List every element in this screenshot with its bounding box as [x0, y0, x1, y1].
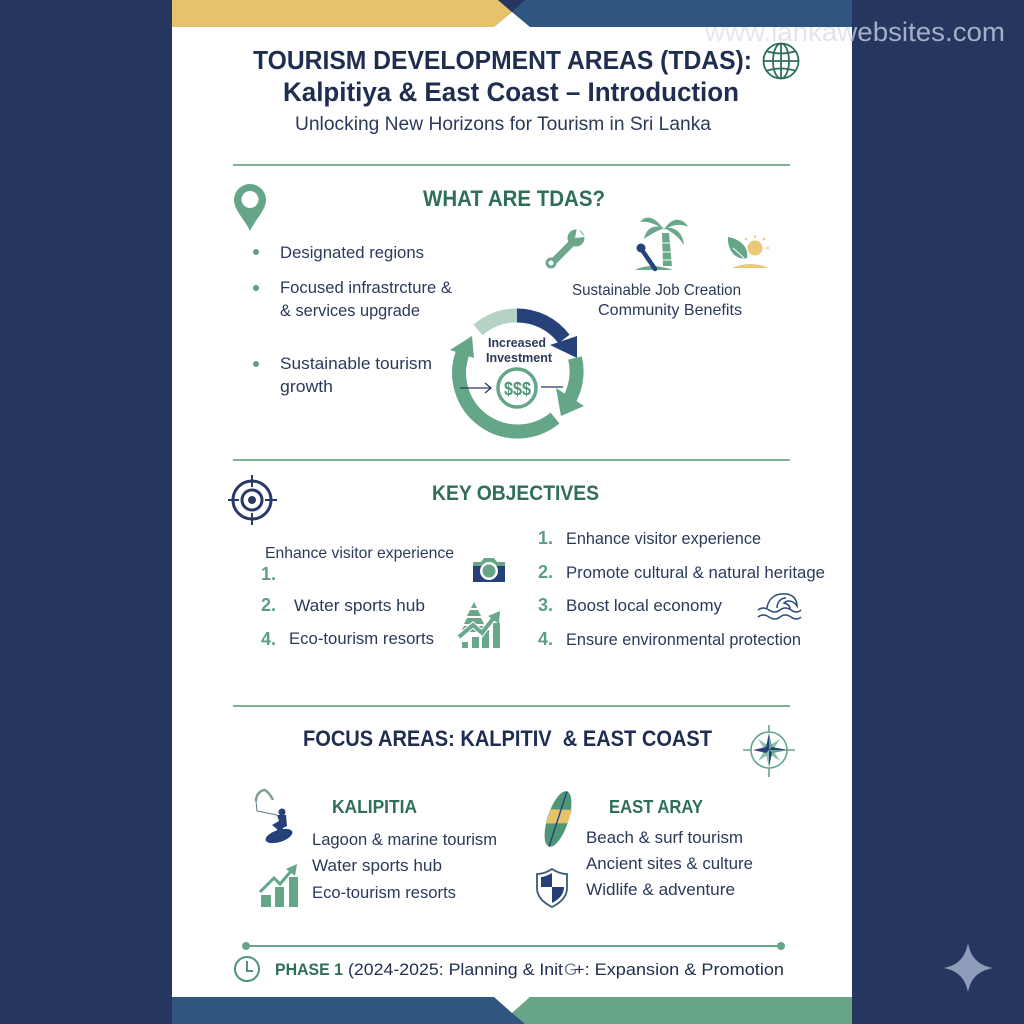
- list: left objectives: 4.: [261, 629, 276, 649]
- panel: Kalpitiya: KALIPITIA: [332, 797, 417, 817]
- timeline line: [242, 942, 785, 950]
- panel: Kalpitiya: [312, 797, 497, 902]
- cycle diagram: increased investment: [450, 315, 584, 432]
- cycle diagram: increased investment: $$$: [504, 379, 531, 399]
- list: right objectives: 1.: [538, 528, 553, 548]
- cycle diagram: increased investment: Increased: [488, 336, 546, 350]
- watermark: www.lankawebsites.com: [704, 17, 1005, 47]
- icon: palm and wrench: [635, 218, 688, 270]
- panel: East Coast: Beach & surf tourism: [586, 828, 743, 847]
- heading: key objectives: KEY OBJECTIVES: [432, 482, 599, 505]
- panel: East Coast: [586, 797, 753, 899]
- icon: pagoda and growth chart: [459, 602, 500, 648]
- panel: East Coast: Ancient sites & culture: [586, 854, 753, 873]
- list: what are TDAs: growth: [280, 377, 333, 396]
- list: right objectives: Enhance visitor experience: [566, 529, 761, 548]
- panel: Kalpitiya: Water sports hub: [312, 856, 442, 875]
- icon: surfboard: [539, 788, 577, 850]
- heading: focus areas: FOCUS AREAS: KALPITIV & EAST COAST: [303, 726, 713, 751]
- title: Kalpitiya & East Coast – Introduction: [283, 77, 739, 107]
- icon: compass: [743, 725, 795, 777]
- list: left objectives: 1.: [261, 564, 276, 584]
- list: right objectives: Boost local economy: [566, 596, 722, 615]
- top banner: [172, 0, 852, 27]
- list: left objectives: 2.: [261, 595, 276, 615]
- list: right objectives: 2.: [538, 562, 553, 582]
- text: job creation and community benefits: Sustainable Job Creation: [572, 282, 741, 299]
- list: right objectives: 3.: [538, 595, 553, 615]
- bottom banner: [172, 997, 852, 1024]
- white card: [172, 27, 852, 997]
- icon: waves: [758, 594, 801, 619]
- icon: target: [228, 475, 277, 525]
- icon: globe: [763, 43, 799, 79]
- list: what are TDAs: [253, 243, 453, 396]
- heading: what are TDAs: WHAT ARE TDAS?: [423, 186, 605, 211]
- icon: map pin: [234, 184, 266, 231]
- timeline text: PHASE 1: [275, 960, 343, 979]
- list: left objectives: [261, 545, 454, 649]
- list: right objectives: Ensure environmental protection: [566, 630, 801, 649]
- list: left objectives: Enhance visitor experience: [265, 545, 454, 562]
- icon: leaf and sun: [728, 235, 769, 268]
- timeline text: G: [564, 960, 577, 979]
- subtitle: Unlocking New Horizons for Tourism in Sri Lanka: [295, 114, 711, 135]
- list: what are TDAs: Sustainable tourism: [280, 354, 432, 373]
- panel: East Coast: Widlife & adventure: [586, 880, 735, 899]
- list: what are TDAs: & services upgrade: [280, 301, 420, 320]
- list: what are TDAs: Designated regions: [280, 243, 424, 262]
- icon: shield: [537, 869, 567, 907]
- panel: Kalpitiya: Eco-tourism resorts: [312, 883, 456, 902]
- timeline text: (2024-2025: Planning & Init: [348, 960, 563, 979]
- list: right objectives: Promote cultural & natural heritage: [566, 563, 825, 582]
- icon: growth chart: [260, 864, 298, 907]
- list: what are TDAs: Focused infrastrcture &: [280, 278, 453, 297]
- list: left objectives: Water sports hub: [294, 596, 425, 615]
- title: TOURISM DEVELOPMENT AREAS (TDAS):: [253, 45, 752, 75]
- icon: kite surfer: [256, 790, 294, 846]
- timeline text: [275, 960, 784, 979]
- text: job creation and community benefits: [572, 282, 742, 319]
- cycle diagram: increased investment: Investment: [486, 351, 553, 365]
- icon: camera: [473, 558, 505, 582]
- icon: clock: [235, 957, 259, 981]
- panel: East Coast: EAST ARAY: [609, 797, 703, 817]
- timeline text: +: Expansion & Promotion: [574, 960, 784, 979]
- text: job creation and community benefits: Community Benefits: [598, 302, 742, 319]
- icon: sparkle: [944, 943, 993, 992]
- panel: Kalpitiya: Lagoon & marine tourism: [312, 830, 497, 849]
- list: right objectives: [538, 528, 825, 649]
- list: right objectives: 4.: [538, 629, 553, 649]
- list: left objectives: Eco-tourism resorts: [289, 629, 434, 648]
- icon: wrench: [546, 228, 585, 268]
- title: [253, 45, 752, 107]
